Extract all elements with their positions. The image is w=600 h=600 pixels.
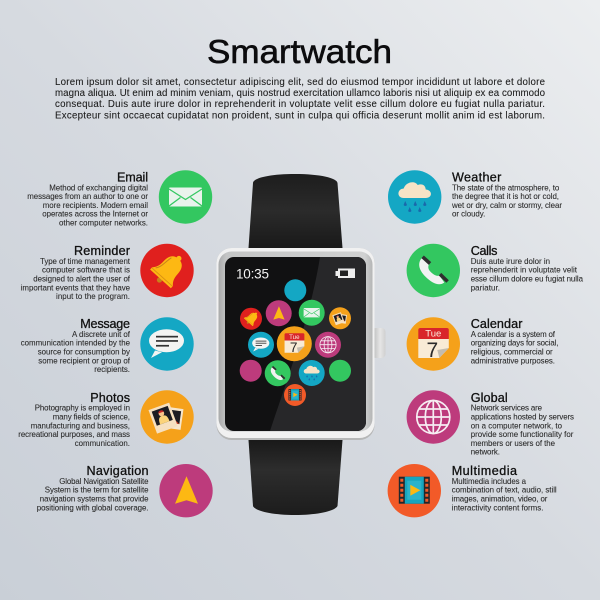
item: Weather xyxy=(388,170,562,224)
icon: weather cloud xyxy=(388,170,441,224)
text: Email: more recipients. Modern email xyxy=(43,201,148,210)
text: Message xyxy=(21,317,131,374)
text: Global: Network services are xyxy=(471,404,543,413)
text: Reminder: Type of time management xyxy=(40,257,131,266)
item: Message xyxy=(21,317,194,374)
text: Reminder xyxy=(21,244,131,301)
text: Email xyxy=(27,171,148,227)
text: Multimedia: combination of text, audio, still xyxy=(452,486,557,495)
text: Calendar: organizing days for social, xyxy=(471,339,558,348)
text: Email: Method of exchanging digital xyxy=(49,183,148,192)
text: Photos: many fields of science, xyxy=(53,412,130,422)
icon: navigation arrow xyxy=(159,464,213,517)
text: Navigation: navigation systems that provide xyxy=(40,494,149,504)
watch screen xyxy=(225,257,366,431)
text: Email: Email xyxy=(117,171,148,185)
text: Photos: Photography is employed in xyxy=(35,404,130,413)
battery icon xyxy=(336,268,355,278)
intro paragraph xyxy=(55,77,545,121)
icon: globe xyxy=(407,390,460,444)
text: Navigation: positioning with global coverage. xyxy=(37,503,148,512)
title: Smartwatch xyxy=(207,33,392,70)
text: Calls: esse cillum dolore eu fugiat nulla xyxy=(471,274,584,284)
text: Email: messages from an author to one or xyxy=(27,192,148,201)
text: Navigation xyxy=(37,464,149,512)
item: Calendar xyxy=(407,317,558,371)
text: Weather: The state of the atmosphere, to xyxy=(452,183,560,192)
watch case xyxy=(216,248,374,440)
text: Navigation: System is the term for satellite xyxy=(45,486,149,495)
text: Calendar: Calendar xyxy=(471,317,522,331)
text: Calls xyxy=(471,244,584,292)
text: Global: provide some functionality for xyxy=(471,430,574,439)
intro paragraph: consequat. Duis aute irure dolor in reprehenderit in voluptate velit esse cillum dolore eu fugiat nulla pariatur. xyxy=(55,99,545,110)
text: Message: A discrete unit of xyxy=(72,330,131,339)
text: Message: some recipient or group of xyxy=(38,356,131,365)
icon: photos xyxy=(140,390,194,444)
icon: email xyxy=(159,170,212,224)
text: Photos xyxy=(18,391,130,448)
text: Multimedia: interactivity content forms. xyxy=(452,503,543,512)
watch band top xyxy=(248,174,342,248)
text: Reminder: Reminder xyxy=(74,244,130,258)
item: Global xyxy=(407,390,574,456)
text: Weather: or cloudy. xyxy=(452,210,485,219)
text: Calendar xyxy=(471,317,558,365)
item: Email xyxy=(27,170,212,227)
text: Weather: the degree that it is hot or cold, xyxy=(452,192,559,201)
text: Global xyxy=(471,391,574,456)
icon: bell xyxy=(140,244,194,297)
watch band bottom xyxy=(248,440,342,515)
text: Message: source for consumption by xyxy=(38,348,130,356)
text: Global: network. xyxy=(471,448,500,456)
clock time: 10:35 xyxy=(236,266,269,281)
icon: calendar xyxy=(407,317,460,371)
text: Photos: manufacturing and business, xyxy=(31,421,130,430)
item: Reminder xyxy=(21,244,194,301)
intro paragraph: magna aliqua. Ut enim ad minim veniam, quis nostrud exercitation ullamco laboris nisi ut aliquip ex ea commodo xyxy=(55,88,545,99)
text: Message: communication intended by the xyxy=(21,339,131,348)
text: Weather: wet or dry, calm or stormy, clear xyxy=(451,201,562,210)
text: Weather xyxy=(451,171,562,219)
text: Message: recipients. xyxy=(94,365,130,374)
icon: speech bubble xyxy=(140,317,194,371)
text: Global: on a computer network, to xyxy=(471,421,563,430)
intro paragraph: Lorem ipsum dolor sit amet, consectetur adipiscing elit, sed do eiusmod tempor incididunt ut labore et dolore xyxy=(55,77,545,88)
text: Navigation: Navigation xyxy=(86,464,148,478)
text: Calls: Duis aute irure dolor in xyxy=(471,257,550,266)
item: Photos xyxy=(18,390,194,448)
text: Photos: communication. xyxy=(75,439,130,448)
text: Reminder: designed to alert the user of xyxy=(33,274,131,284)
watch crown xyxy=(372,328,386,358)
text: Calls: Calls xyxy=(471,244,497,258)
text: Email: operates across the Internet or xyxy=(42,210,148,219)
text: Weather: Weather xyxy=(452,171,501,185)
item: Calls xyxy=(407,244,584,297)
text: Global: applications hosted by servers xyxy=(471,412,574,422)
text: Global: Global xyxy=(471,391,508,405)
text: Global: members or users of the xyxy=(471,439,556,448)
text: Reminder: important events that they have xyxy=(21,283,131,292)
text: Message: Message xyxy=(80,317,130,331)
text: Calls: reprehenderit in voluptate velit xyxy=(471,266,578,275)
text: Photos: Photos xyxy=(90,391,130,405)
text: Calendar: religious, commercial or xyxy=(471,348,553,356)
text: Multimedia: Multimedia includes a xyxy=(452,477,527,486)
text: Calendar: A calendar is a system of xyxy=(471,330,556,339)
smartwatch xyxy=(216,174,386,515)
text: Calendar: administrative purposes. xyxy=(471,356,555,365)
text: Multimedia: Multimedia xyxy=(452,464,517,478)
text: Email: other computer networks. xyxy=(59,218,148,227)
icon: phone xyxy=(407,244,460,297)
text: Reminder: input to the program. xyxy=(56,292,130,301)
intro paragraph: Excepteur sint occaecat cupidatat non proident, sunt in culpa qui officia deserunt mollit anim id est laborum. xyxy=(55,110,545,121)
item: Multimedia xyxy=(388,464,557,517)
item: Navigation xyxy=(37,464,213,517)
text: Reminder: computer software that is xyxy=(42,266,130,275)
text: Calls: pariatur. xyxy=(471,283,500,292)
text: Navigation: Global Navigation Satellite xyxy=(59,477,149,486)
icon: film strip xyxy=(388,464,441,517)
text: Photos: recreational purposes, and mass xyxy=(18,430,130,439)
mini app icons xyxy=(240,279,351,406)
text: Multimedia: images, animation, video, or xyxy=(452,494,548,504)
text: Multimedia xyxy=(452,464,557,512)
